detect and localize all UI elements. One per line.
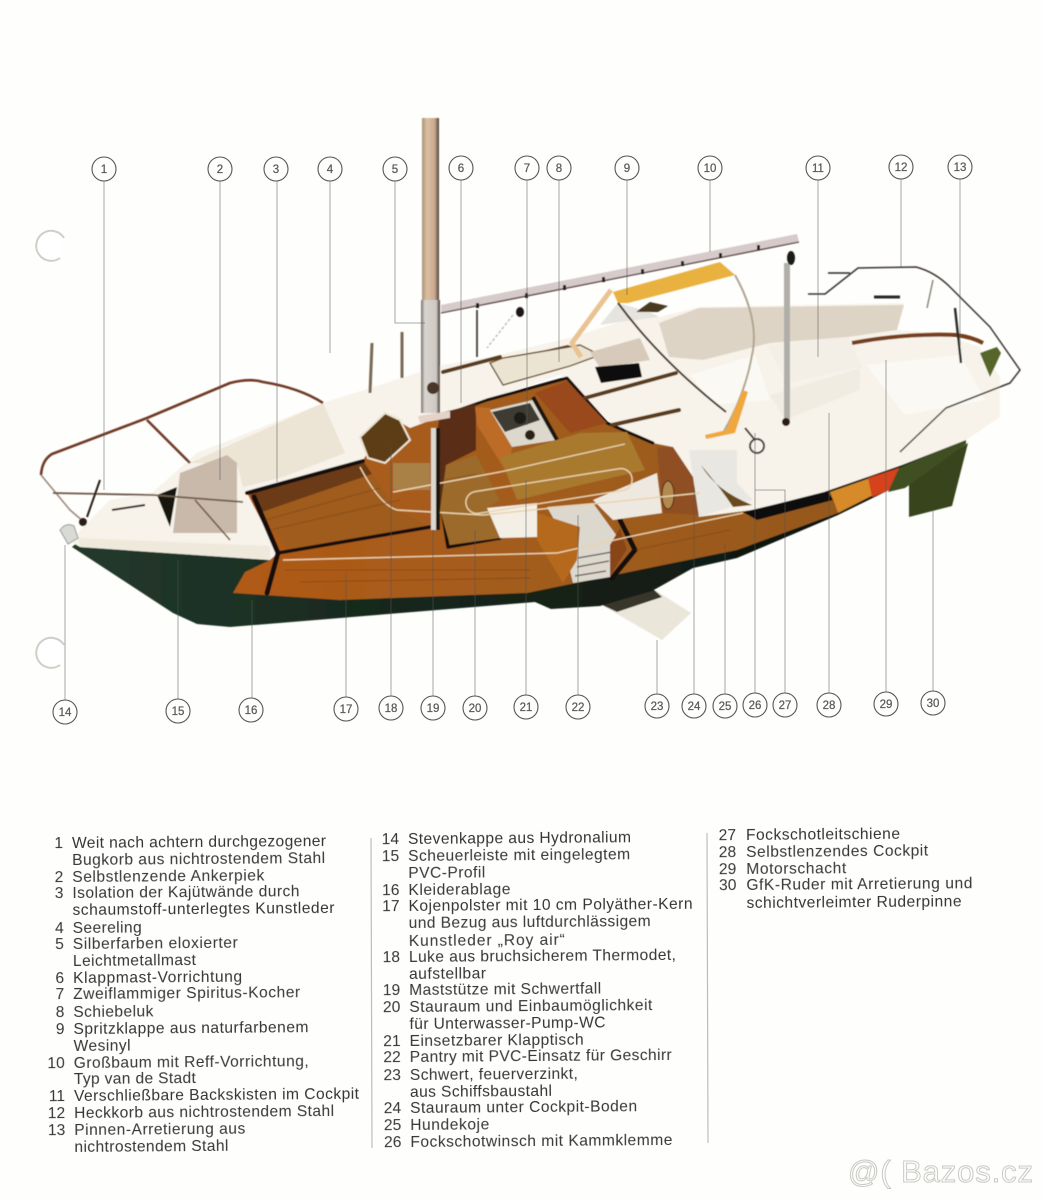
legend column 2: 25 [384, 1117, 402, 1134]
watermark: @( Bazos.cz [848, 1154, 1033, 1189]
legend column 1: 10 [47, 1055, 65, 1072]
legend column 1: Isolation der Kajütwände durch [72, 883, 299, 902]
legend column 2: Kunstleder „Roy air“ [409, 932, 565, 950]
legend column 2: 26 [384, 1134, 401, 1151]
legend column 2: 14 [382, 831, 399, 848]
legend column 3: GfK-Ruder mit Arretierung und [746, 875, 972, 894]
legend column 3: schichtverleimter Ruderpinne [746, 893, 962, 912]
number callouts top: 6 [458, 163, 464, 175]
number callouts bottom: 30 [927, 698, 939, 710]
legend column 2: 21 [383, 1033, 401, 1050]
beige cockpit coaming [659, 305, 904, 360]
legend column 2: 23 [383, 1067, 401, 1084]
legend column 2: Scheuerleiste mit eingelegtem [408, 846, 630, 865]
legend column 2: 24 [384, 1100, 401, 1117]
legend column 2: Schwert, feuerverzinkt, [410, 1066, 578, 1084]
number callouts bottom: 18 [385, 703, 397, 715]
legend column 2: und Bezug aus luftdurchlässigem [409, 913, 651, 932]
dark hatch surround [533, 397, 557, 440]
legend column 1: 7 [55, 986, 64, 1003]
number callouts top: 3 [273, 164, 279, 176]
legend column 2: 17 [382, 898, 400, 915]
red wood locker [535, 381, 607, 433]
legend column 1: nichtrostendem Stahl [74, 1138, 228, 1156]
legend column 2: für Unterwasser-Pump-WC [409, 1014, 606, 1033]
number callouts top: 7 [524, 163, 530, 175]
stern rail [808, 267, 1020, 452]
number callouts bottom: 23 [651, 701, 663, 713]
number callouts bottom: 28 [823, 700, 835, 712]
number callouts bottom: 24 [688, 701, 701, 713]
number callouts bottom: 19 [427, 703, 439, 715]
number callouts bottom: 16 [245, 705, 257, 717]
spray hood window [600, 303, 659, 325]
stove top [490, 400, 557, 447]
number callouts top: 1 [101, 164, 107, 176]
legend column 3: 29 [719, 861, 736, 878]
legend column 1: 8 [56, 1004, 64, 1021]
leader lines [65, 179, 960, 700]
legend column 1: Pinnen-Arretierung aus [74, 1121, 246, 1139]
number callouts top: 8 [556, 163, 562, 175]
mast foot fitting [427, 382, 439, 394]
legend column 3: Fockschotleitschiene [746, 826, 900, 844]
hull stripe at bow [78, 538, 270, 560]
boom [441, 234, 799, 313]
dark mast bay [436, 404, 476, 510]
legend column 3: Selbstlenzendes Cockpit [746, 843, 929, 861]
number callouts bottom: 22 [572, 702, 584, 714]
legend column 2: 15 [382, 848, 400, 865]
table area [500, 432, 645, 500]
white box under cockpit [689, 450, 753, 517]
number callouts bottom: 26 [749, 700, 761, 712]
bunk cushion [393, 463, 430, 490]
legend column 1: Schiebeluk [73, 1003, 154, 1021]
legend column 1: 2 [55, 869, 63, 886]
stem cap [60, 525, 78, 544]
legend column 2: Stauraum und Einbaumöglichkeit [409, 997, 653, 1016]
legend column 1: Weit nach achtern durchgezogener [72, 833, 326, 852]
legend column 2 [382, 829, 694, 1151]
legend column 3: 28 [719, 844, 736, 861]
pantry white panel [487, 503, 537, 538]
legend column 3: 27 [719, 827, 736, 844]
cream upholstery lines [283, 444, 743, 560]
hull underwater body [72, 425, 966, 627]
engine compartment [830, 468, 899, 513]
legend column 2: Einsetzbarer Klapptisch [410, 1032, 584, 1050]
engine black strip [743, 492, 833, 520]
interior wood mass [233, 378, 838, 600]
legend column 2: 22 [383, 1049, 401, 1066]
number callouts bottom: 17 [340, 704, 352, 716]
number callouts top: 5 [392, 164, 398, 176]
deck stanchions [370, 332, 402, 393]
punch hole upper [36, 231, 64, 261]
number callouts bottom [53, 691, 945, 724]
mast step plate [418, 411, 450, 423]
number callouts bottom: 20 [469, 703, 481, 715]
legend column 1: Klappmast-Vorrichtung [73, 969, 242, 987]
legend column 2: Kojenpolster mit 10 cm Polyäther-Kern [408, 896, 693, 915]
legend column 2: PVC-Profil [408, 864, 485, 882]
forward locker hatch [173, 455, 237, 533]
number callouts bottom: 27 [779, 700, 791, 712]
legend column 1: 11 [49, 1088, 65, 1105]
wood end right of pantry [610, 528, 627, 577]
legend column 1: Verschließbare Backskisten im Cockpit [74, 1086, 360, 1105]
hood hinge fitting [636, 302, 668, 312]
legend column 1: Wesinyl [74, 1038, 131, 1055]
legend column 2: Maststütze mit Schwertfall [409, 980, 601, 999]
legend column 1: 13 [48, 1122, 65, 1139]
legend column 1: Bugkorb aus nichtrostendem Stahl [72, 850, 325, 869]
punch hole lower [36, 638, 64, 668]
legend column 1: 6 [55, 970, 64, 987]
cabin wall [262, 474, 427, 550]
legend column 2: Stauraum unter Cockpit-Boden [410, 1098, 637, 1117]
bow anchor [80, 480, 145, 525]
sliding hatch [490, 345, 600, 385]
wood plank shading [265, 474, 730, 582]
legend column 1: Zweiflammiger Spiritus-Kocher [73, 984, 300, 1003]
legend column 1: Leichtmetallmast [73, 952, 197, 970]
stern olive patch [980, 347, 1001, 377]
legend column 1: 4 [55, 920, 64, 937]
legend column 1: 1 [54, 835, 63, 852]
legend column 2: Stevenkappe aus Hydronalium [408, 829, 631, 848]
legend column 2: Pantry mit PVC-Einsatz für Geschirr [410, 1047, 672, 1066]
boat cutaway illustration [41, 118, 1020, 640]
legend column 1: Selbstlenzende Ankerpiek [72, 867, 265, 886]
legend column 2: Kleiderablage [408, 881, 510, 899]
hull locker [657, 447, 699, 515]
floor boards [440, 455, 500, 545]
legend column 2: Luke aus bruchsicherem Thermodet, [409, 947, 676, 966]
mast support [431, 428, 440, 530]
number callouts bottom: 29 [880, 699, 892, 711]
legend column 1: schaumstoff-unterlegtes Kunstleder [72, 900, 335, 919]
legend column 1: Typ van de Stadt [74, 1070, 197, 1088]
legend column 1: Spritzklappe aus naturfarbenem [73, 1019, 309, 1038]
bow rail [41, 380, 323, 540]
cabin side rails [443, 347, 679, 425]
reef line and block [477, 307, 524, 357]
rudder [909, 443, 968, 517]
number callouts bottom: 15 [172, 706, 184, 718]
legend column 1: Heckkorb aus nichtrostendem Stahl [74, 1103, 334, 1122]
number callouts top: 13 [954, 162, 966, 174]
stern olive hull [888, 438, 966, 492]
mast [422, 118, 439, 348]
foredeck panel [190, 403, 345, 487]
number callouts top: 11 [812, 163, 824, 175]
number callouts top: 9 [624, 163, 630, 175]
number callouts top: 12 [895, 162, 907, 174]
legend column 1: 9 [56, 1021, 65, 1038]
wood door [537, 513, 580, 583]
spray hood bows [618, 275, 754, 433]
legend column 1: Seereling [73, 919, 142, 937]
companionway [590, 338, 650, 383]
mast lower section [421, 300, 440, 413]
legend column 3: 30 [719, 877, 737, 894]
legend column 1: 3 [55, 885, 63, 902]
forward hatch recess [360, 413, 410, 463]
legend column 1: Silberfarben eloxierter [73, 935, 238, 953]
winch [745, 428, 764, 453]
legend column 1: Großbaum mit Reff-Vorrichtung, [74, 1053, 309, 1072]
pantry shelf [547, 503, 627, 583]
number callouts top: 2 [217, 164, 223, 176]
cabin wall upper brick band [250, 461, 372, 512]
number callouts bottom: 21 [520, 702, 532, 714]
legend column 1 [46, 833, 360, 1156]
number callouts bottom: 25 [719, 701, 731, 713]
legend column 2: aufstellbar [409, 965, 486, 983]
mainsheet tackle [782, 251, 795, 426]
stove box side [475, 407, 512, 470]
orange strap [705, 390, 748, 439]
legend column 3: Motorschacht [746, 860, 847, 878]
red engine cover [868, 468, 899, 497]
number callouts bottom: 14 [59, 707, 72, 719]
legend column 2: 19 [383, 982, 400, 999]
legend column 1: 5 [55, 936, 64, 953]
number callouts top: 4 [327, 164, 334, 176]
centreboard [598, 588, 691, 640]
forward dark opening [157, 487, 177, 527]
spray hood canvas [613, 262, 735, 303]
brown wedge [701, 465, 752, 507]
galley white panel [593, 473, 662, 520]
tiller [852, 335, 983, 343]
column dividers [371, 833, 708, 1148]
legend column 2: Fockschotwinsch mit Kammklemme [410, 1132, 672, 1151]
legend column 3 [719, 825, 973, 912]
black cut edges [247, 378, 653, 593]
legend column 1: 12 [48, 1105, 65, 1122]
number callouts top: 10 [704, 163, 716, 175]
white deck and topsides [73, 303, 1000, 560]
spray hood frame [572, 290, 611, 357]
number callouts top [92, 155, 972, 181]
legend column 2: 18 [383, 949, 400, 966]
cockpit seats [690, 337, 985, 420]
legend column 2: 16 [382, 882, 399, 899]
legend column 2: Hundekoje [410, 1116, 489, 1134]
legend column 2: aus Schiffsbaustahl [410, 1083, 552, 1101]
legend column 2: 20 [383, 999, 401, 1016]
